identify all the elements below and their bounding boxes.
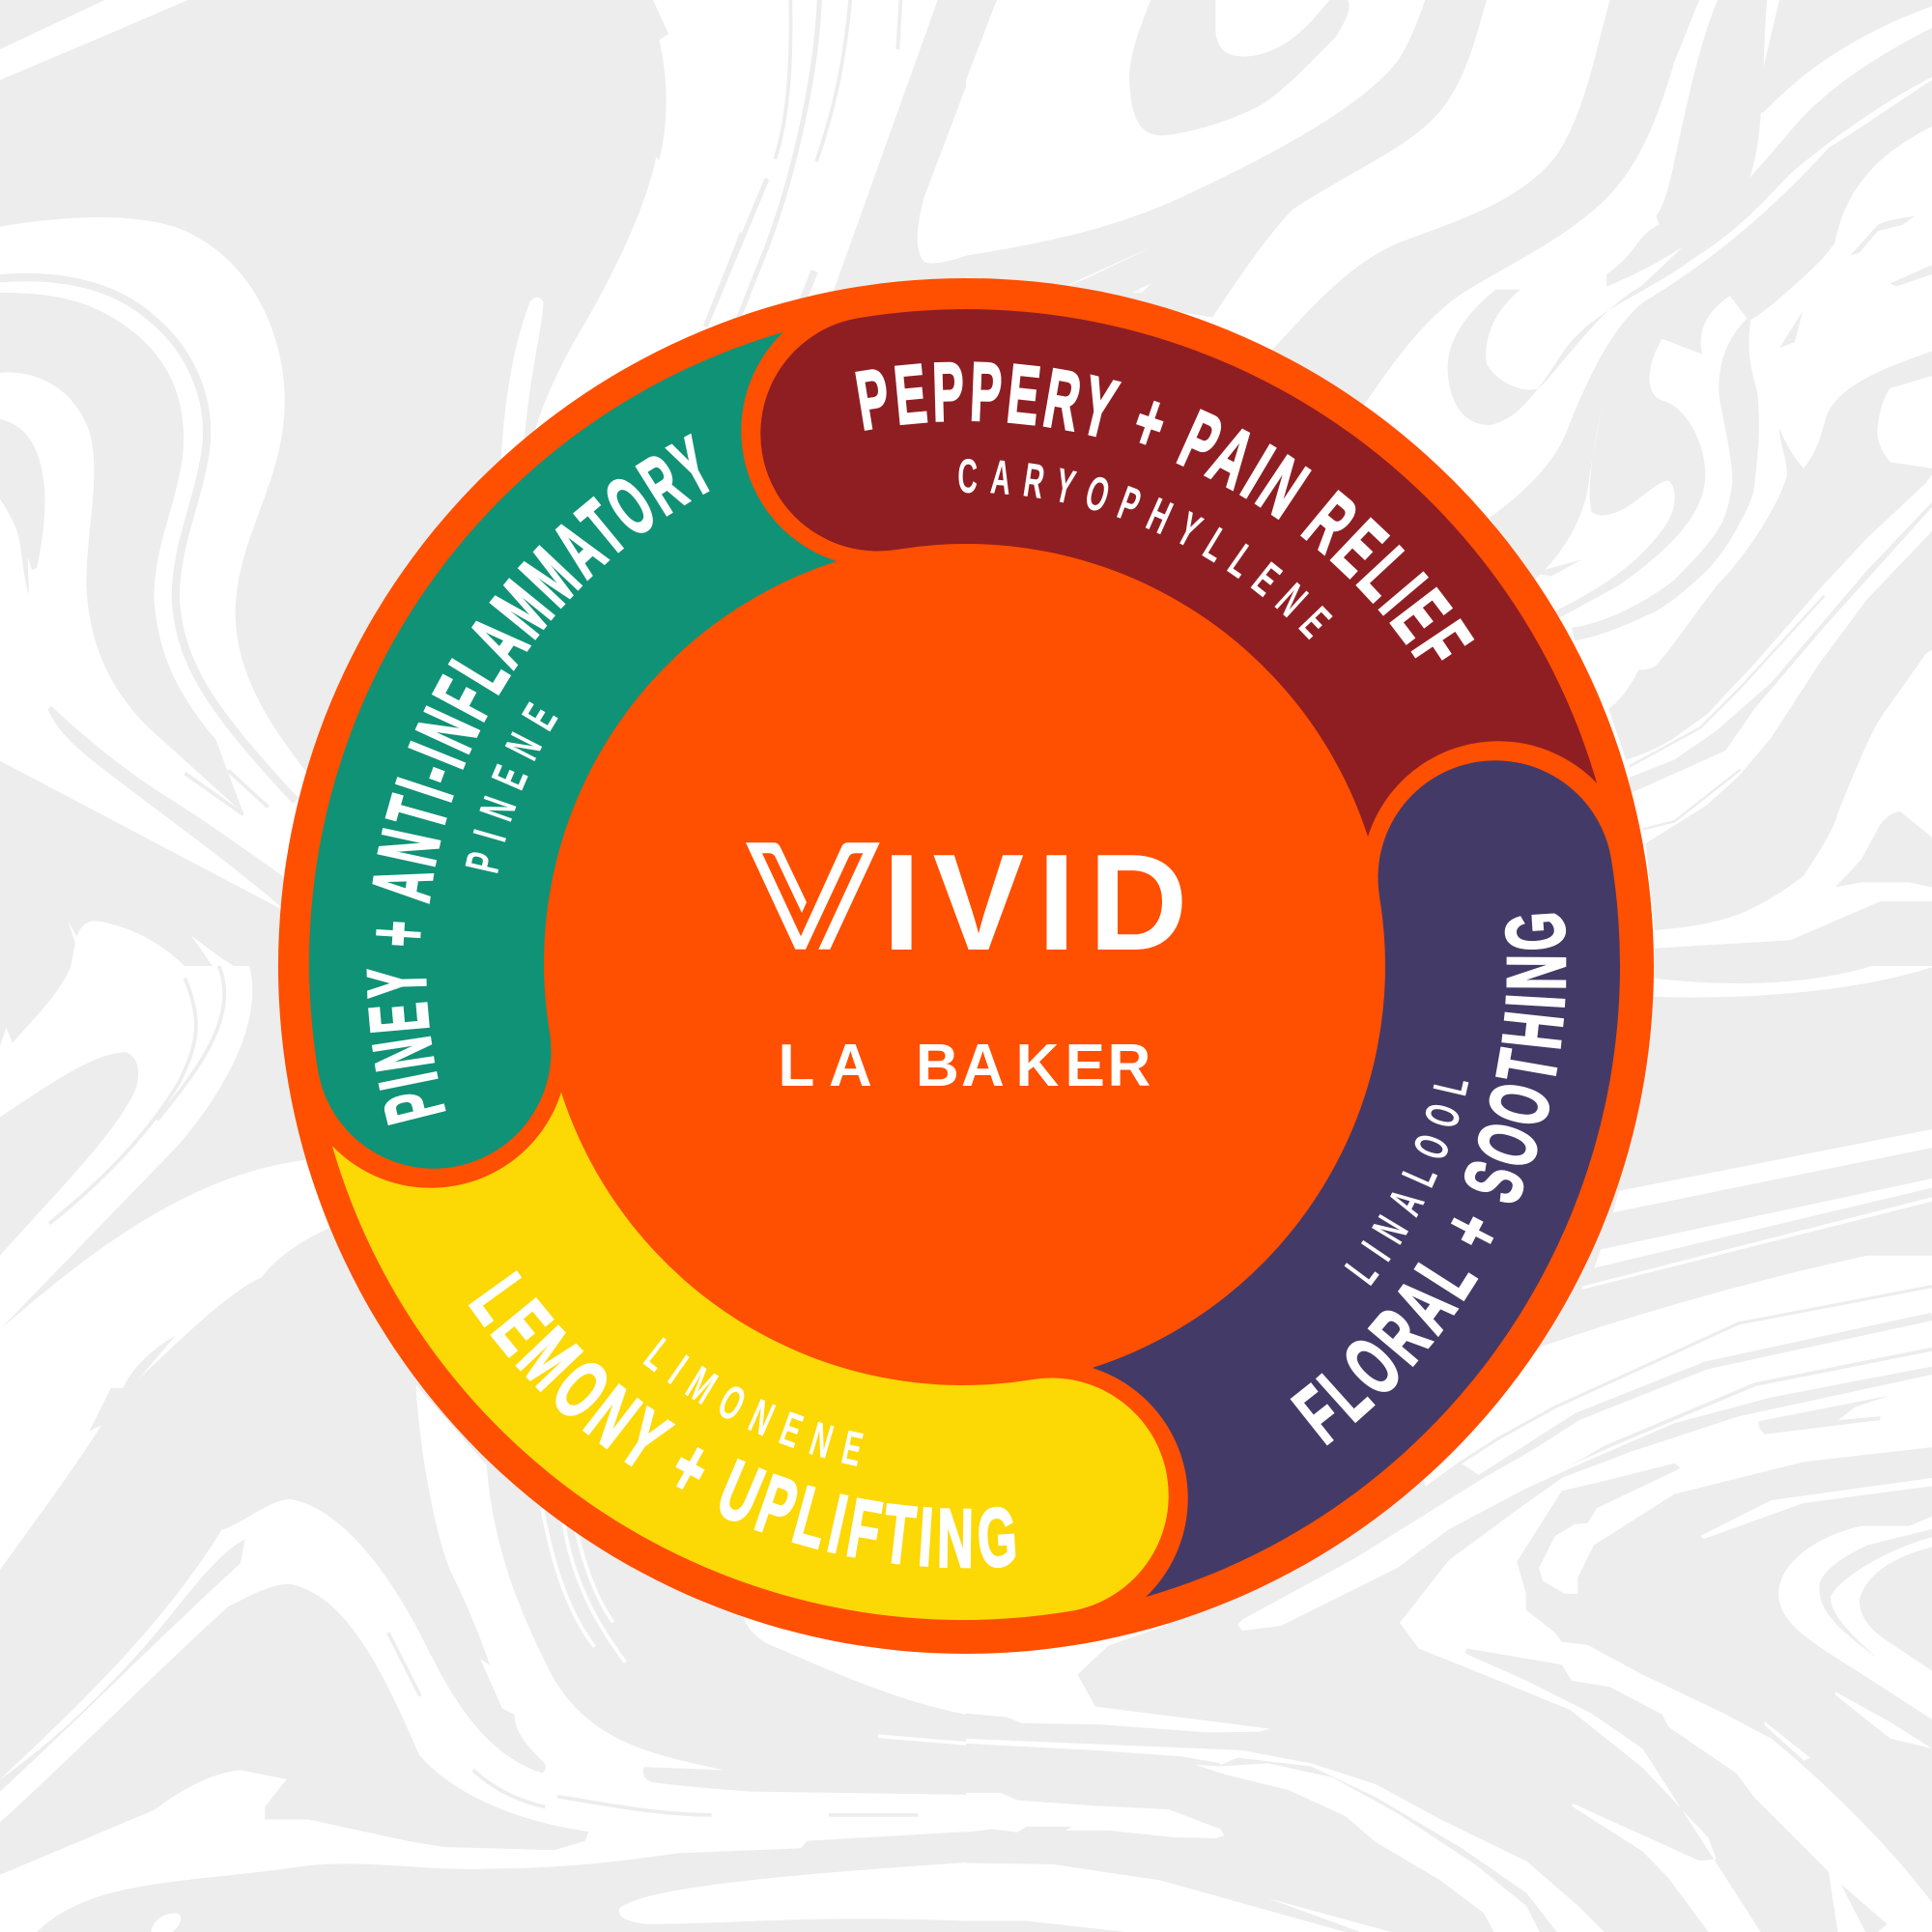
label: caryophyllene: CARYOPHYLLENE bbox=[958, 459, 1333, 639]
heading: peppery + pain relief: PEPPERY + PAIN RELIEF bbox=[855, 361, 1474, 661]
segment shape: yellow arc bbox=[332, 1093, 1169, 1620]
outer orange disc bbox=[278, 278, 1654, 1654]
center logo: vivid bbox=[746, 826, 1188, 980]
segment shape: dark red arc bbox=[760, 309, 1597, 837]
icon: stylised V of the logo bbox=[746, 842, 880, 950]
label: pinene: PINENE bbox=[466, 701, 558, 873]
subtitle: la baker: LA BAKER bbox=[779, 1033, 1151, 1099]
heading: piney + anti-inflammatory: PINEY + ANTI-INFLAMMATORY bbox=[367, 433, 710, 1125]
segment shape: purple arc bbox=[1093, 760, 1620, 1597]
label: limonene: LIMONENE bbox=[643, 1337, 864, 1466]
heading: lemony + uplifting: LEMONY + UPLIFTING bbox=[468, 1270, 1016, 1569]
panel: lemony and uplifting bbox=[332, 1092, 1169, 1620]
logo wordmark: IVID bbox=[883, 826, 1188, 980]
panel: peppery and pain relief bbox=[760, 309, 1598, 837]
heading: floral + soothing: FLORAL + SOOTHING bbox=[1291, 914, 1567, 1445]
panel: piney and anti-inflammatory bbox=[309, 332, 837, 1169]
segment shape: teal arc bbox=[309, 332, 837, 1169]
label: linalool: LINALOOL bbox=[1345, 1081, 1468, 1287]
panel: floral and soothing bbox=[1093, 760, 1620, 1598]
